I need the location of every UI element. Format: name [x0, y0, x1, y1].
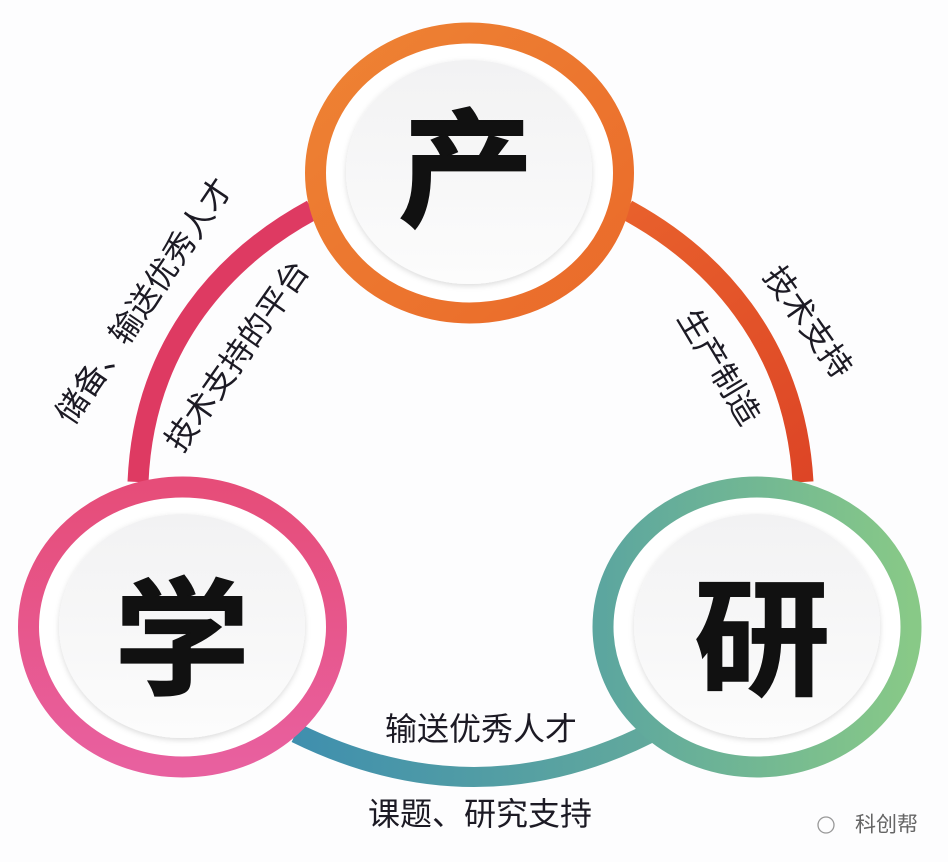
- label: 输送优秀人才: 输送优秀人才: [385, 711, 577, 747]
- node: 学: [28, 487, 336, 767]
- arc: 学 to 研: [296, 733, 650, 777]
- label: 课题、研究支持: 课题、研究支持: [368, 796, 592, 832]
- node: 学: 学: [114, 570, 250, 712]
- icon: watermark bubble: [818, 817, 834, 833]
- label: 生产制造: 生产制造: [671, 303, 767, 431]
- watermark text: 科创帮: [855, 814, 918, 836]
- arc: 产 to 研: [627, 210, 803, 482]
- label: 技术支持的平台: 技术支持的平台: [158, 254, 316, 458]
- arc: 学 to 产: [138, 210, 312, 482]
- node: 产: [316, 33, 624, 313]
- label: 储备、输送优秀人才: 储备、输送优秀人才: [49, 172, 239, 430]
- label: 技术支持: 技术支持: [757, 259, 859, 385]
- node: 研: [603, 487, 911, 767]
- node: 研: 研: [694, 570, 830, 712]
- node: 产: 产: [398, 101, 534, 243]
- watermark: [818, 814, 918, 836]
